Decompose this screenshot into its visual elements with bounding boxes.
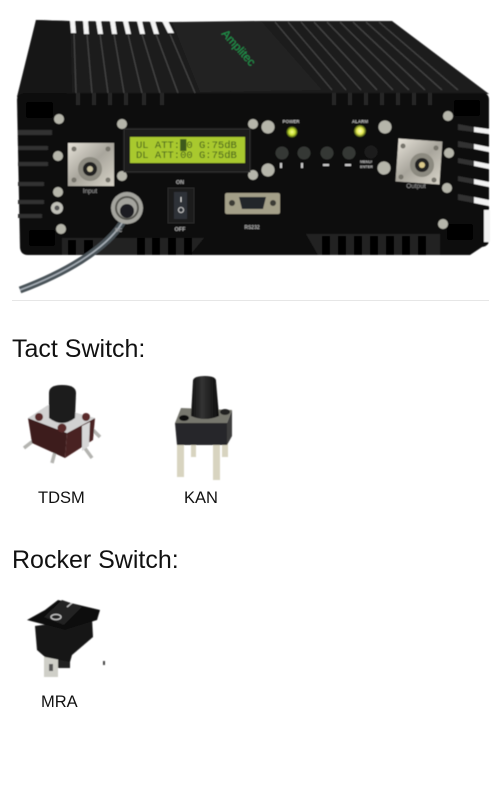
screws <box>53 111 454 234</box>
side vents left <box>18 130 52 218</box>
antenna cable connector: DC <box>115 228 123 234</box>
input connector: Input <box>83 188 97 195</box>
LED indicators <box>282 119 368 138</box>
rocker power switch: ON <box>176 180 184 186</box>
antenna cable connector <box>20 192 143 290</box>
side vents right <box>458 124 474 203</box>
logo on top: Amplitec <box>219 28 257 69</box>
LED indicators: ALARM <box>352 119 368 124</box>
device photo: repeater unit <box>17 20 490 290</box>
label: MRA: MRA <box>41 693 78 711</box>
upper fin slots <box>76 93 432 105</box>
label: TDSM: TDSM <box>38 489 85 507</box>
device top casing <box>17 20 489 100</box>
RS232 port <box>225 193 280 231</box>
icon: MRA rocker switch <box>27 600 105 677</box>
LCD display <box>124 129 250 172</box>
lower fin band and slots <box>62 238 204 255</box>
heading: Tact Switch: Tact Switch: <box>12 335 145 363</box>
icon: KAN tact switch <box>175 376 232 480</box>
control buttons: ENTER <box>360 165 373 169</box>
RS232 port: RS232 <box>244 225 260 231</box>
control buttons <box>276 146 378 169</box>
label: KAN: KAN <box>184 489 218 507</box>
output connector: Output <box>406 183 426 190</box>
grounding screw <box>51 202 63 214</box>
LCD display: UL ATT:█0 G:75dB <box>136 139 237 152</box>
corner slots <box>26 100 480 246</box>
LCD display: DL ATT:00 G:75dB <box>136 150 237 162</box>
output connector <box>396 139 442 190</box>
LED indicators: POWER <box>282 119 300 124</box>
control buttons: MENU/ <box>360 160 373 164</box>
icon: TDSM tact switch <box>24 385 100 463</box>
heading: Rocker Switch: Rocker Switch: <box>12 546 179 574</box>
input connector <box>68 143 114 195</box>
rocker power switch: OFF <box>174 227 186 233</box>
rocker power switch <box>168 180 194 233</box>
device front panel <box>17 93 490 290</box>
divider <box>12 300 489 301</box>
